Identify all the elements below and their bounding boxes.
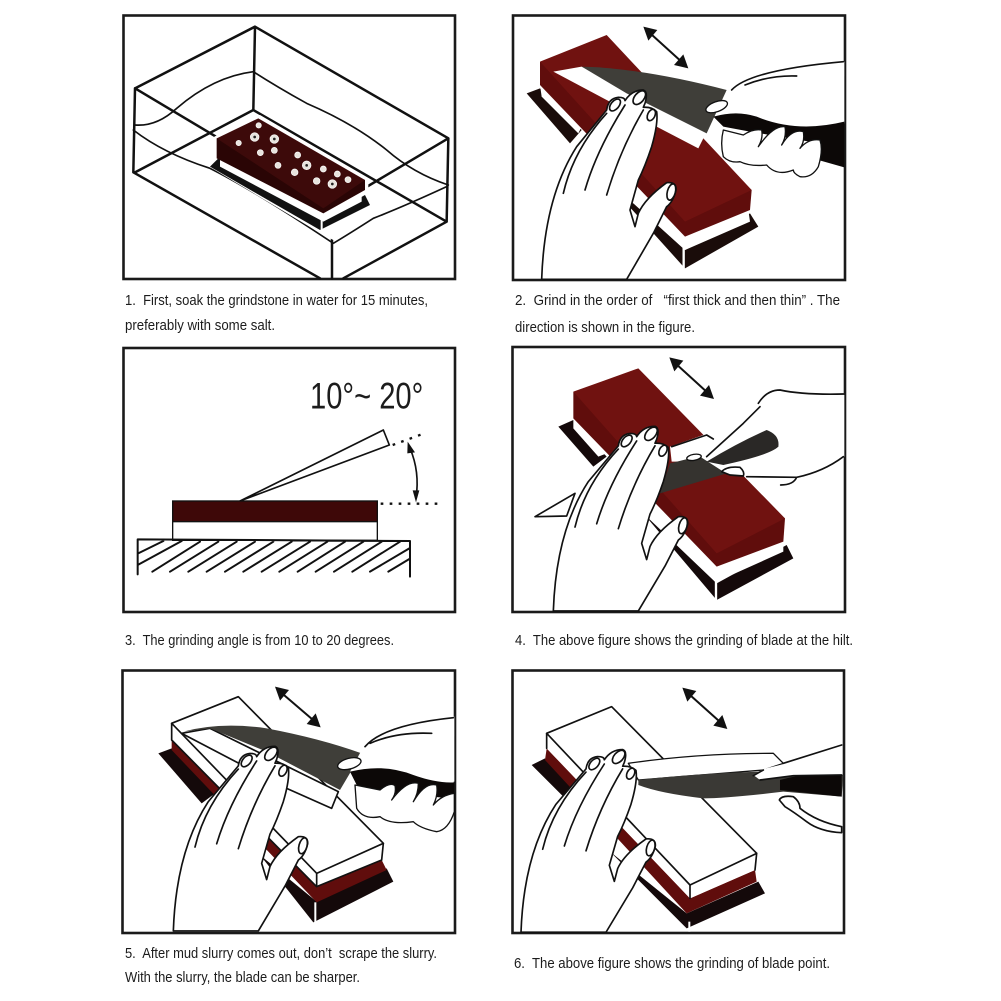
- blade tip: [535, 493, 575, 517]
- hands, knife and stone illustration: [527, 27, 844, 279]
- caption 5: With the slurry, the blade can be sharper.: [125, 969, 360, 986]
- panel 2 frame: [513, 16, 845, 280]
- hands, knife and stone illustration: [158, 687, 454, 931]
- knife: [628, 753, 783, 780]
- panel 4: grinding at the hilt: [512, 347, 853, 649]
- caption 1: preferably with some salt.: [125, 317, 275, 334]
- panel 3 frame: [124, 348, 455, 612]
- panel 5 frame: [122, 670, 455, 933]
- panel 4 frame: [512, 347, 845, 612]
- caption 2: 2. Grind in the order of “first thick and then thin” . The: [515, 292, 840, 309]
- salt bubbles: [236, 123, 351, 188]
- caption 1: [125, 292, 428, 334]
- caption 1: 1. First, soak the grindstone in water for 15 minutes,: [125, 292, 428, 309]
- knife blade: [182, 728, 338, 808]
- blade: [670, 434, 727, 462]
- caption 4: 4. The above figure shows the grinding of blade at the hilt.: [515, 632, 853, 649]
- movement arrow: [682, 688, 727, 729]
- angle arrow: [407, 442, 419, 502]
- panel 6 frame: [512, 670, 844, 933]
- angle label: 10°~ 20°: [310, 374, 423, 416]
- panel 3: grinding angle: [124, 348, 455, 649]
- caption 6: 6. The above figure shows the grinding of blade point.: [514, 955, 830, 972]
- panel 2: grinding direction: [513, 16, 845, 336]
- blade: [240, 430, 389, 501]
- caption 3: 3. The grinding angle is from 10 to 20 degrees.: [125, 632, 394, 649]
- movement arrow: [643, 27, 688, 68]
- left hand: [173, 745, 309, 931]
- table: [138, 539, 410, 577]
- caption 2: direction is shown in the figure.: [515, 319, 695, 336]
- movement arrow: [669, 357, 714, 399]
- movement arrow: [275, 687, 321, 727]
- knife hand: [700, 390, 844, 477]
- angle diagram: [138, 374, 440, 577]
- hands, knife and stone illustration: [535, 357, 844, 611]
- knife blade: [553, 67, 710, 148]
- panel 1: soaking the stone: [124, 16, 455, 334]
- left hand: [542, 89, 677, 279]
- caption 5: [125, 945, 437, 986]
- panel 5: keep the slurry: [122, 670, 455, 986]
- panel 1 frame: [124, 16, 455, 279]
- stone: [173, 501, 377, 522]
- caption 5: 5. After mud slurry comes out, don’t scrape the slurry.: [125, 945, 437, 962]
- knife hand: [350, 717, 454, 782]
- left hand: [521, 748, 657, 932]
- panel 6: grinding the point: [512, 670, 844, 972]
- dotted reference lines: [381, 434, 440, 504]
- knife hand: [723, 62, 844, 123]
- knife hand: [753, 745, 842, 780]
- water tank and stone illustration: [133, 27, 448, 278]
- hands, knife and stone illustration: [521, 688, 843, 932]
- left hand: [553, 425, 689, 611]
- caption 2: [515, 292, 840, 336]
